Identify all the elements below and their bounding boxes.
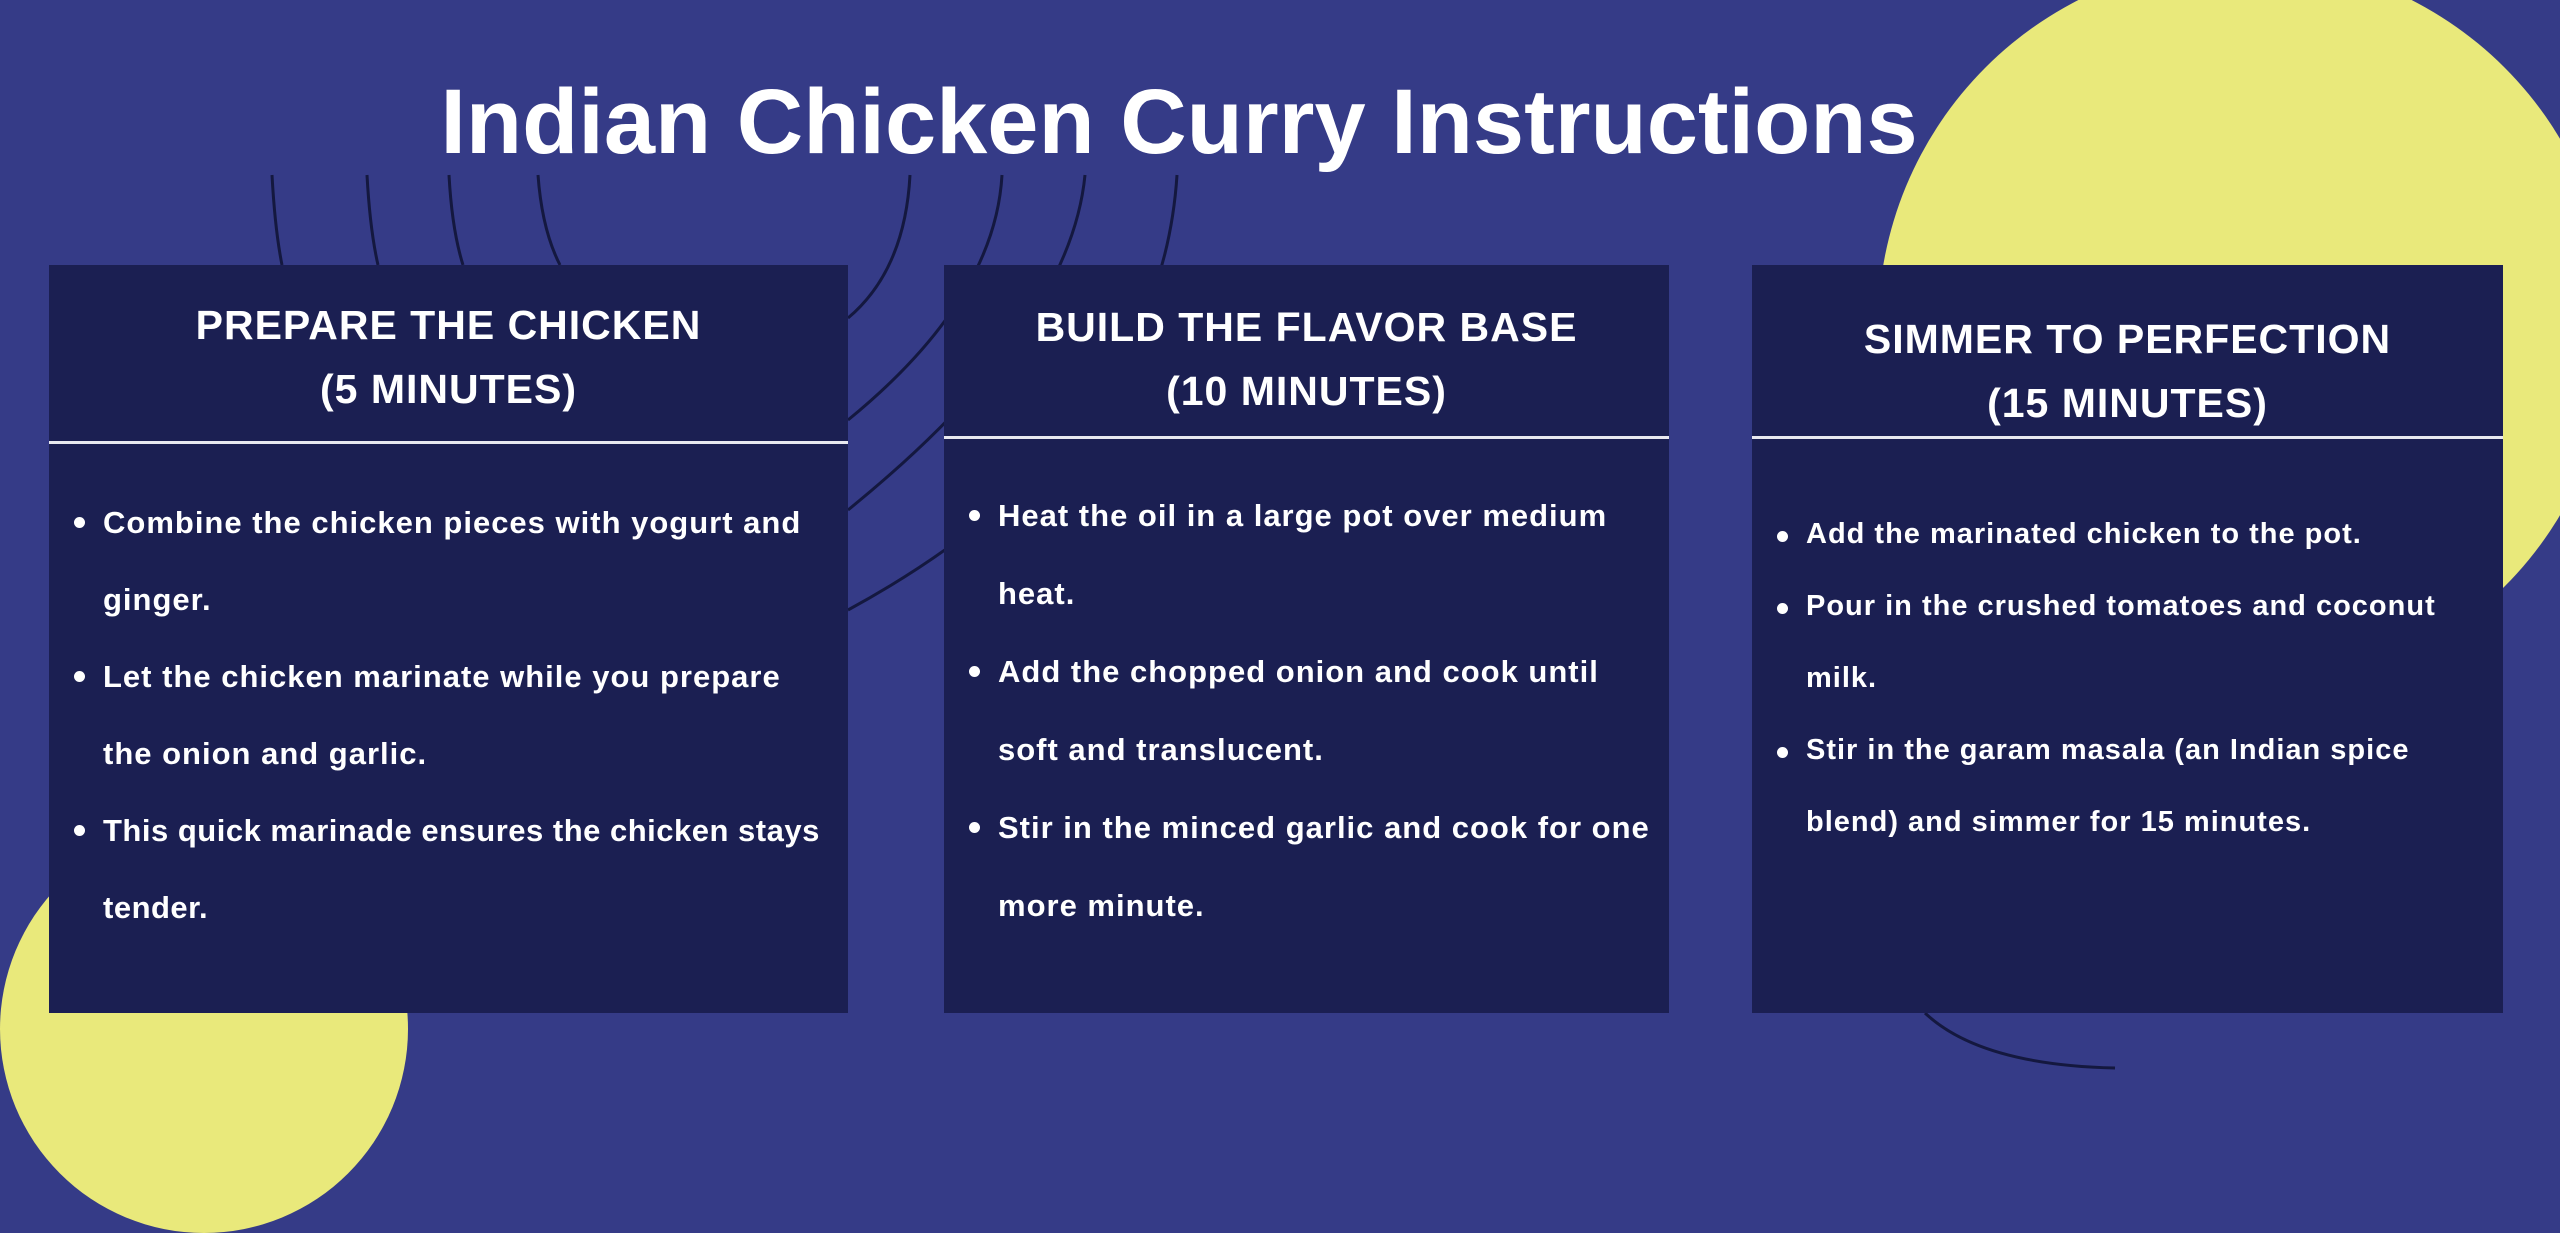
steps list: Stir in the minced garlic and cook for one: [998, 810, 1650, 845]
steps list: Combine the chicken pieces with yogurt and: [103, 505, 801, 540]
steps list: soft and translucent.: [998, 732, 1324, 767]
panel: build the flavor base: [944, 265, 1669, 1013]
decor: yellow circle bottom left: [0, 825, 408, 1233]
heading: (15 MINUTES): [1987, 380, 2268, 426]
steps list: [1777, 518, 2436, 838]
steps list: Add the chopped onion and cook until: [998, 654, 1599, 689]
steps list: ginger.: [103, 582, 212, 617]
steps list: milk.: [1806, 662, 1877, 694]
heading: PREPARE THE CHICKEN: [196, 302, 701, 348]
panel: simmer to perfection: [1752, 265, 2503, 1013]
steps list: Pour in the crushed tomatoes and coconut: [1806, 590, 2436, 622]
steps list: Heat the oil in a large pot over medium: [998, 498, 1607, 533]
heading: (5 MINUTES): [320, 366, 577, 412]
decor: yellow circle top right: [1878, 0, 2560, 694]
heading: SIMMER TO PERFECTION: [1864, 316, 2391, 362]
steps list: [74, 505, 820, 925]
heading: [1864, 316, 2391, 426]
title: Indian Chicken Curry Instructions: [440, 71, 1918, 173]
steps list: Let the chicken marinate while you prepare: [103, 659, 781, 694]
heading: [196, 302, 701, 412]
steps list: tender.: [103, 890, 208, 925]
heading: [1036, 304, 1577, 414]
steps list: blend) and simmer for 15 minutes.: [1806, 806, 2311, 838]
steps list: [969, 498, 1650, 923]
steps list: the onion and garlic.: [103, 736, 427, 771]
steps list: Stir in the garam masala (an Indian spice: [1806, 734, 2409, 766]
panel: prepare the chicken: [49, 265, 848, 1013]
steps list: heat.: [998, 576, 1075, 611]
steps list: more minute.: [998, 888, 1205, 923]
heading: BUILD THE FLAVOR BASE: [1036, 304, 1577, 350]
steps list: This quick marinade ensures the chicken stays: [103, 813, 820, 848]
heading: (10 MINUTES): [1166, 368, 1447, 414]
steps list: Add the marinated chicken to the pot.: [1806, 518, 2362, 550]
